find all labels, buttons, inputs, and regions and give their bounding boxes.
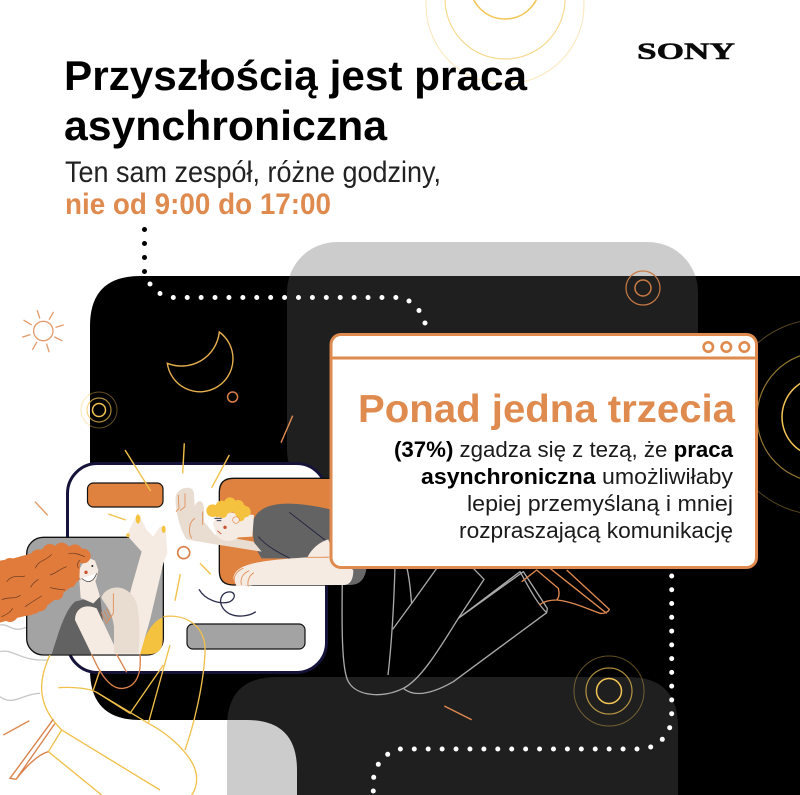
subtitle — [65, 156, 441, 221]
squiggle — [199, 589, 256, 616]
hair curls — [2, 553, 85, 617]
icon: concentric circles lower right — [574, 656, 644, 726]
sleeve shadow — [333, 567, 367, 585]
icon: concentric circles at top — [426, 0, 584, 84]
small ring — [178, 547, 190, 559]
dotted path lower white — [371, 576, 672, 794]
sparks — [108, 443, 229, 601]
chest skin — [307, 539, 333, 557]
woman frame — [27, 537, 163, 655]
finger lines — [234, 557, 328, 587]
body text: lepiej przemyślaną i mniej — [467, 491, 733, 516]
body text: asynchroniczna umożliwiłaby — [421, 464, 733, 489]
orange accent dashes — [3, 416, 472, 735]
window buttons — [704, 342, 749, 352]
body text: (37%) zgadza się z tezą, że praca — [394, 437, 734, 462]
sony logo: SONY — [637, 39, 736, 64]
subtitle: Ten sam zespół, różne godziny, — [65, 156, 441, 189]
yellow shape — [140, 617, 163, 654]
raised arm and hand — [176, 488, 262, 552]
title: asynchroniczna — [64, 102, 388, 149]
facial details — [82, 565, 97, 582]
hair — [206, 497, 251, 521]
title bar line — [331, 356, 756, 360]
leg outline orange — [10, 654, 140, 779]
callout card — [331, 334, 756, 568]
icon: orange concentric circles — [626, 271, 660, 305]
card body — [331, 334, 756, 568]
neck — [79, 580, 100, 603]
illustration: woman — [0, 514, 205, 795]
lower arm and hand — [233, 557, 353, 587]
translucent panel upper — [287, 242, 698, 500]
nails — [126, 514, 166, 537]
title — [64, 52, 528, 149]
dotted path upper white — [148, 282, 428, 326]
hair — [0, 543, 91, 623]
head — [213, 512, 254, 541]
facial details — [214, 517, 239, 534]
forearm — [75, 606, 118, 654]
torso lines — [258, 512, 325, 558]
dotted path black — [142, 227, 147, 274]
legs outline yellow — [42, 616, 205, 795]
icon: small concentric circles left — [81, 392, 117, 428]
knee — [102, 587, 139, 653]
body text: rozpraszającą komunikację — [459, 518, 733, 543]
torso — [52, 595, 107, 654]
orange pill — [88, 483, 163, 507]
body text — [394, 437, 734, 543]
icon: large concentric circles right — [724, 319, 800, 515]
grey pill — [187, 624, 305, 649]
headline: Ponad jedna trzecia — [358, 388, 735, 431]
icon: small orange ring — [228, 392, 238, 402]
spark orange left — [35, 502, 48, 515]
hand lines — [101, 593, 113, 623]
app window — [68, 464, 326, 672]
illustration: jumping legs outline — [342, 567, 609, 695]
torso — [253, 504, 333, 558]
raised arm and hand — [115, 516, 167, 654]
black background panel — [90, 276, 800, 795]
man frame — [219, 478, 333, 585]
icon: sun — [23, 311, 63, 352]
face — [77, 557, 98, 586]
translucent panel lower — [227, 677, 678, 795]
subtitle: nie od 9:00 do 17:00 — [65, 188, 331, 221]
wavy grey lines — [0, 625, 48, 700]
icon: moon — [167, 332, 233, 392]
hand lines — [176, 493, 203, 538]
illustration: man — [176, 478, 367, 587]
title: Przyszłością jest praca — [64, 52, 528, 99]
